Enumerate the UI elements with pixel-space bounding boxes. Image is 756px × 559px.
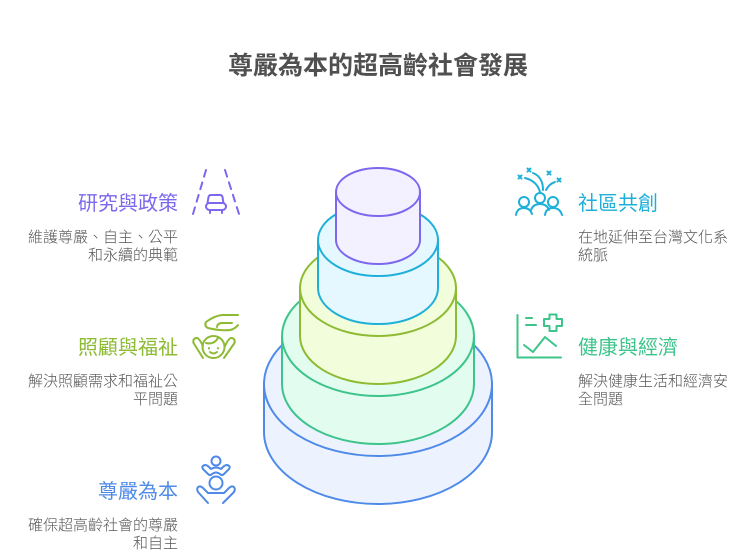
text: care and welfare description: 解決照顧需求和福祉公 xyxy=(28,373,178,390)
title: 尊嚴為本的超高齡社會發展 xyxy=(228,52,528,80)
heading: community co-creation: 社區共創 xyxy=(578,193,658,215)
text: community co-creation description xyxy=(578,229,728,264)
text: health and economy description: 全問題 xyxy=(578,391,623,408)
tier: community co-creation (cyan) xyxy=(318,204,438,324)
text: dignity first description: 確保超高齡社會的尊嚴 xyxy=(28,517,178,534)
icon: health chart with plus xyxy=(518,314,562,358)
heading: health and economy: 健康與經濟 xyxy=(578,337,678,359)
heading: care and welfare: 照顧與福祉 xyxy=(78,337,178,359)
icon: people with raised arms xyxy=(197,456,235,503)
icon: hand over child xyxy=(193,315,238,358)
text: health and economy description xyxy=(578,373,728,408)
text: dignity first description xyxy=(28,517,178,552)
text: community co-creation description: 統脈 xyxy=(578,247,608,264)
icon: road with car xyxy=(193,170,239,214)
icon: community group with fireworks xyxy=(516,168,562,215)
tier: research and policy (purple) xyxy=(336,168,420,264)
heading: dignity first: 尊嚴為本 xyxy=(98,481,178,503)
text: care and welfare description: 平問題 xyxy=(133,391,178,408)
heading: research and policy: 研究與政策 xyxy=(78,193,178,215)
text: research and policy description: 和永續的典範 xyxy=(88,247,178,264)
tier: care and welfare (yellow-green) xyxy=(300,240,456,384)
text: community co-creation description: 在地延伸至台灣文化系 xyxy=(578,229,728,246)
text: research and policy description xyxy=(28,229,178,264)
text: dignity first description: 和自主 xyxy=(133,535,178,552)
tier: health and economy (green) xyxy=(282,276,474,444)
text: health and economy description: 解決健康生活和經濟安 xyxy=(578,373,728,390)
tier: dignity base (blue) xyxy=(264,312,492,504)
text: research and policy description: 維護尊嚴、自主、公平 xyxy=(28,229,178,246)
text: care and welfare description xyxy=(28,373,178,408)
